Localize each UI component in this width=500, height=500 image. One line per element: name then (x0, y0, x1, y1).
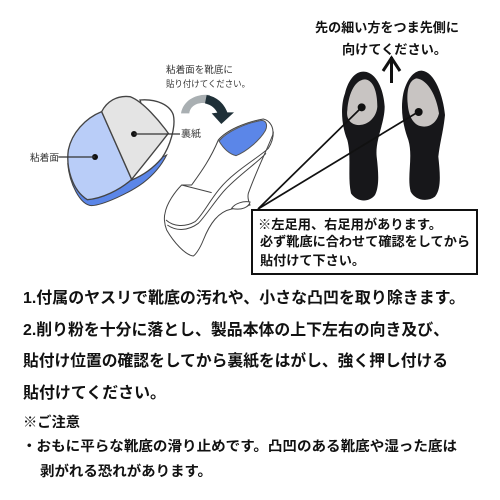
icon: curved arrow (181, 95, 234, 124)
callout: left and right note: 必ず靴底に合わせて確認をしてから (260, 234, 470, 249)
text block: cautions: ※ご注意 (23, 414, 80, 430)
shoe sole blue pad (219, 120, 267, 156)
text block: instructions: 2.削り粉を十分に落とし、製品本体の上下左右の向き及び、 (23, 321, 449, 339)
pointer lines (258, 107, 418, 209)
callout: left and right note: ※左足用、右足用があります。 (258, 217, 442, 232)
callout: left and right note: 貼付けて下さい。 (260, 253, 365, 268)
text block: instructions (23, 288, 465, 402)
label: apply adhesive side (166, 64, 250, 89)
text block: instructions: 貼付けてください。 (23, 383, 166, 402)
illustration: shoe sole (164, 119, 273, 256)
text block: cautions (22, 414, 457, 479)
illustration: heel pad with backing paper (58, 95, 234, 206)
illustration: right insole (402, 71, 445, 200)
text block: instructions: 貼付け位置の確認をしてから裏紙をはがし、強く押し付ける (23, 351, 448, 370)
label: adhesive side: 粘着面 (30, 152, 59, 164)
text block: cautions: 剥がれる恐れがあります。 (40, 463, 212, 479)
label: apply adhesive side: 粘着面を靴底に (166, 64, 233, 76)
heading: toe direction note: 先の細い方をつま先側に (315, 20, 459, 35)
label: backing paper: 裏紙 (181, 128, 202, 140)
icon: up arrow (383, 57, 400, 83)
heading: toe direction note (315, 20, 459, 57)
illustration: left insole (342, 72, 385, 200)
callout: left and right note (252, 210, 477, 274)
heading: toe direction note: 向けてください。 (342, 42, 447, 57)
label: apply adhesive side: 貼り付けてください。 (166, 78, 250, 89)
text block: instructions: 1.付属のヤスリで靴底の汚れや、小さな凸凹を取り除きます。 (23, 288, 465, 307)
text block: cautions: ・おもに平らな靴底の滑り止めです。凸凹のある靴底や湿った底は (22, 438, 457, 454)
